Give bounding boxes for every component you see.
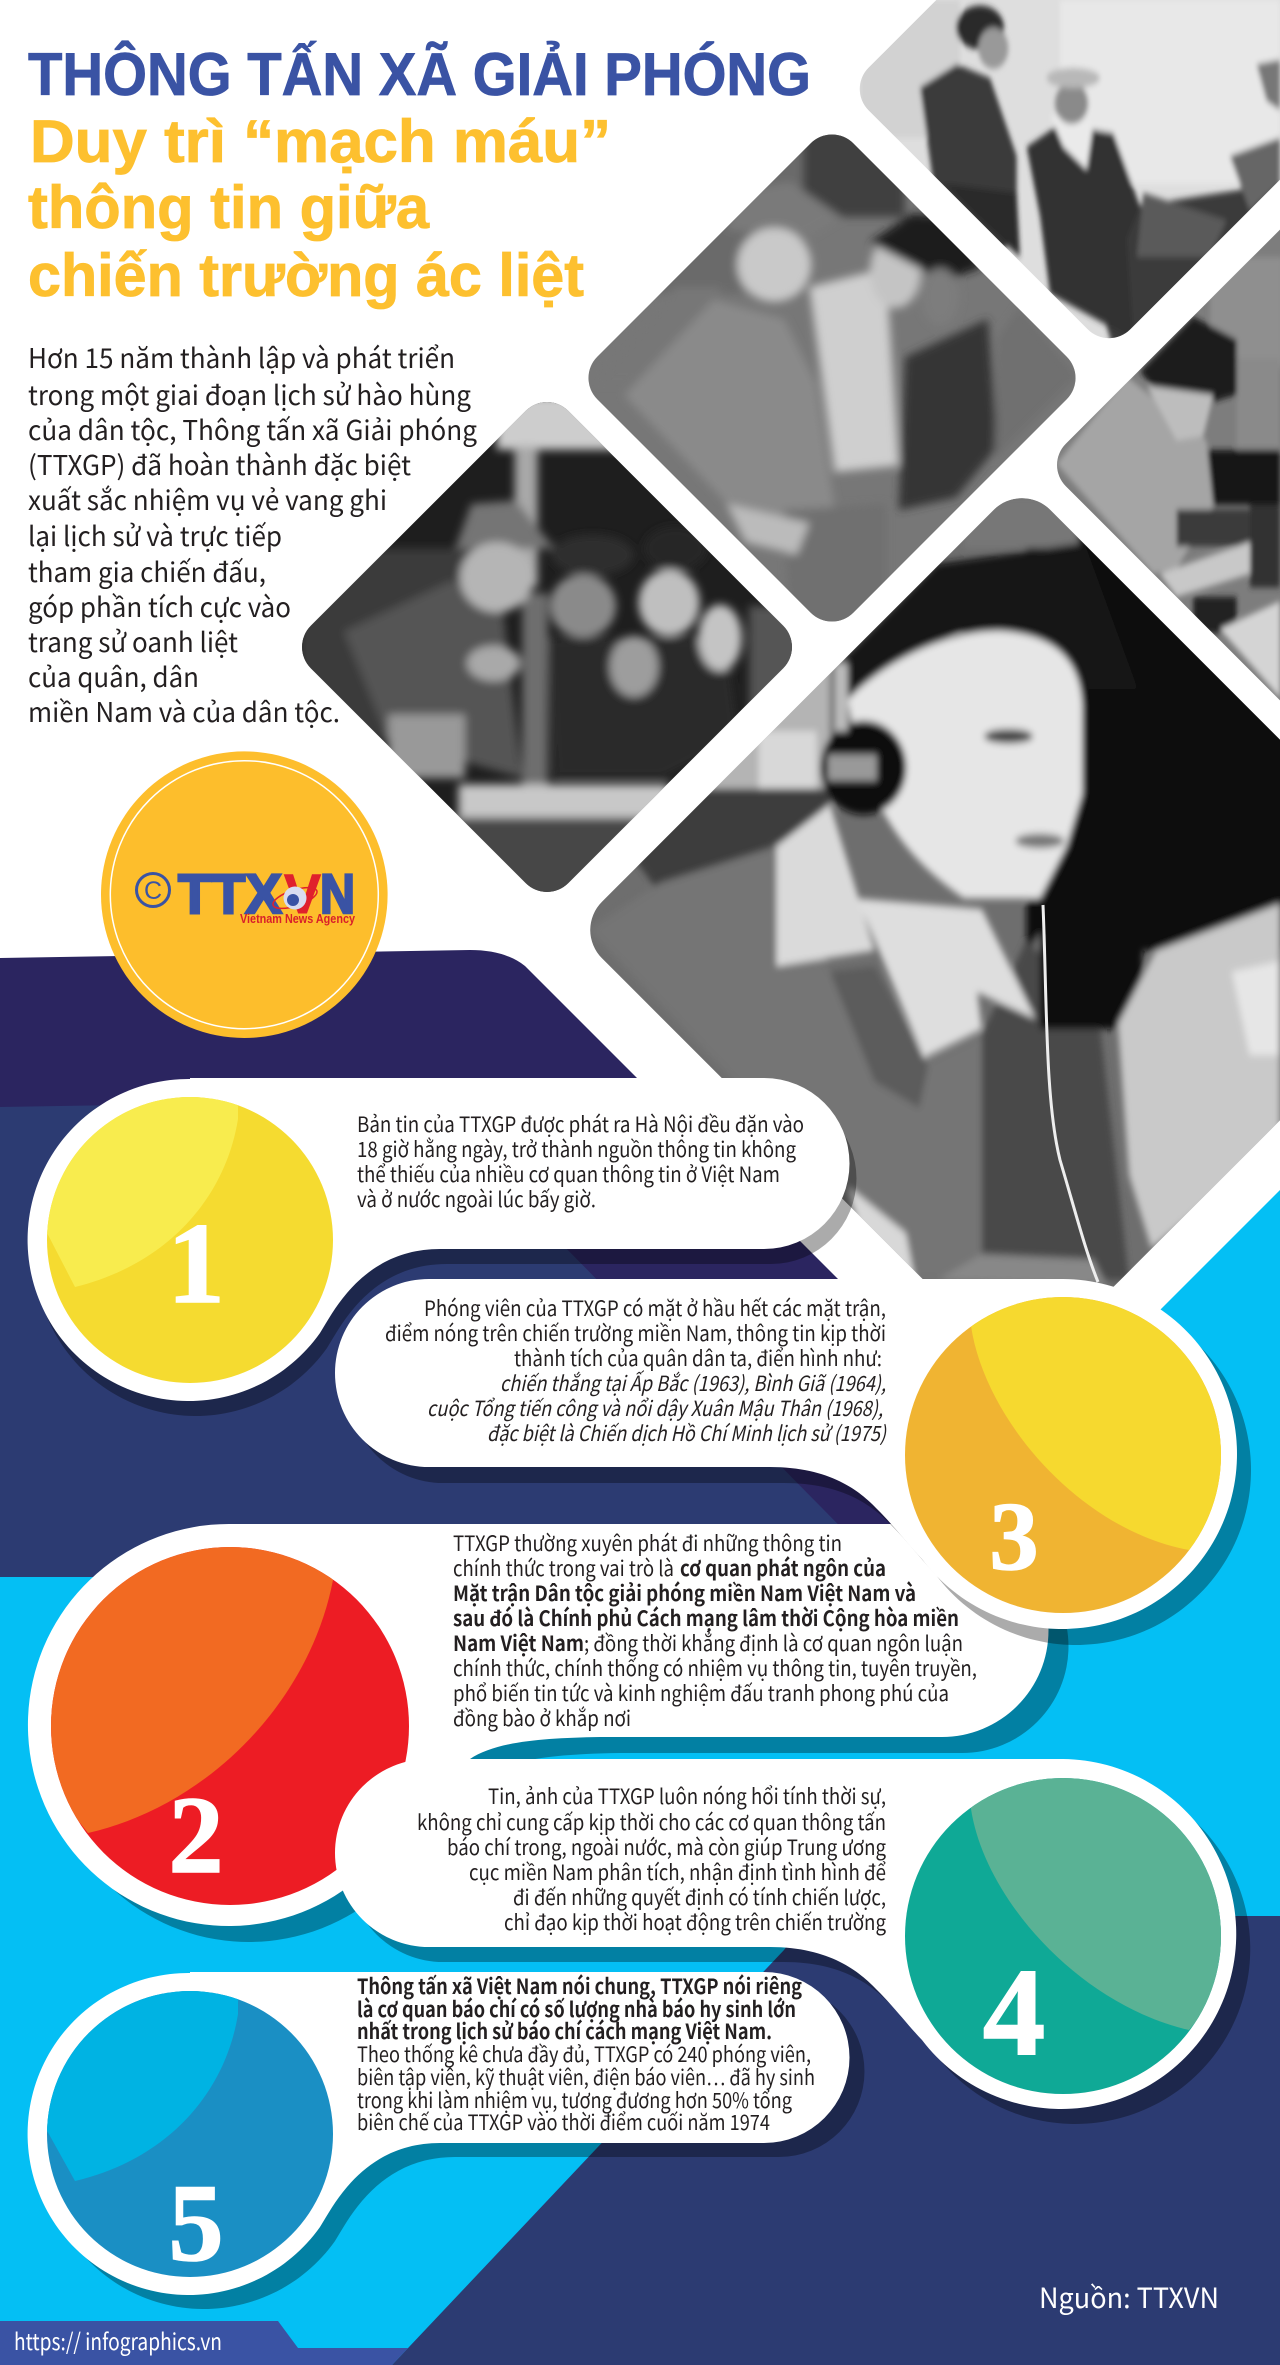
callout 2: cơ quan phát ngôn của: [680, 1553, 886, 1583]
callout 5: là cơ quan báo chí có số lượng nhà báo hy sinh lớn: [357, 1994, 796, 2024]
callout 3: thành tích của quân dân ta, điển hình như:: [514, 1343, 882, 1373]
callout 2: TTXGP thường xuyên phát đi những thông tin: [453, 1528, 842, 1558]
callout 1: và ở nước ngoài lúc bấy giờ.: [357, 1184, 596, 1214]
intro paragraph: miền Nam và của dân tộc.: [28, 691, 340, 730]
callout 3: chiến thắng tại Ấp Bắc (1963), Bình Giã (1964),: [500, 1368, 886, 1398]
callout 5: nhất trong lịch sử báo chí cách mạng Việt Nam.: [357, 2016, 772, 2046]
intro paragraph: của dân tộc, Thông tấn xã Giải phóng: [28, 409, 477, 448]
callout 2: chính thức trong vai trò là: [453, 1553, 674, 1583]
intro paragraph: lại lịch sử và trực tiếp: [28, 515, 282, 554]
title: thông tin giữa: [28, 174, 430, 241]
title: THÔNG TẤN XÃ GIẢI PHÓNG: [28, 41, 811, 108]
intro paragraph: trong một giai đoạn lịch sử hào hùng: [28, 374, 471, 413]
logo badge: Vietnam News Agency: [240, 912, 355, 926]
title: Duy trì “mạch máu”: [30, 108, 611, 175]
callout 3: đặc biệt là Chiến dịch Hồ Chí Minh lịch sử (1975): [487, 1418, 887, 1448]
logo badge: [101, 751, 388, 1038]
callout 4: 4: [983, 1944, 1045, 2082]
callout 2: chính thức, chính thống có nhiệm vụ thông tin, tuyên truyền,: [453, 1653, 977, 1683]
logo badge: N: [320, 862, 355, 925]
callout 2: sau đó là Chính phủ Cách mạng lâm thời Cộng hòa miền: [453, 1603, 959, 1633]
callout 4: Tin, ảnh của TTXGP luôn nóng hổi tính thời sự,: [488, 1781, 886, 1811]
photo: reporter with a camera: [1057, 230, 1280, 700]
callout 4: [335, 1759, 1250, 2124]
callout 5: biên tập viên, kỹ thuật viên, điện báo viên… đã hy sinh: [357, 2062, 815, 2092]
photo: three men at a window: [290, 395, 800, 901]
callout 3: 3: [990, 1483, 1038, 1591]
callout 5: biên chế của TTXGP vào thời điểm cuối năm 1974: [357, 2107, 770, 2137]
intro paragraph: (TTXGP) đã hoàn thành đặc biệt: [28, 444, 411, 483]
callout 4: cục miền Nam phân tích, nhận định tình hình để: [469, 1857, 886, 1887]
callout 5: trong khi làm nhiệm vụ, tương đương hơn 50% tổng: [357, 2085, 792, 2115]
title: [28, 41, 811, 309]
callout 4: đi đến những quyết định có tính chiến lược,: [513, 1882, 886, 1912]
callout 5: Theo thống kê chưa đầy đủ, TTXGP có 240 phóng viên,: [357, 2039, 811, 2069]
source credit: Nguồn: TTXVN: [1039, 2277, 1219, 2317]
callout 2: ; đồng thời khẳng định là cơ quan ngôn luận: [584, 1628, 963, 1658]
callout 5: Thông tấn xã Việt Nam nói chung, TTXGP nói riêng: [357, 1971, 802, 2001]
intro paragraph: trang sử oanh liệt: [28, 621, 238, 660]
callout 1: thể thiếu của nhiều cơ quan thông tin ở Việt Nam: [357, 1159, 780, 1189]
callout 1: 1: [167, 1200, 225, 1327]
intro paragraph: tham gia chiến đấu,: [28, 551, 266, 590]
callout 4: chỉ đạo kịp thời hoạt động trên chiến trường: [504, 1907, 886, 1937]
callout 2: phổ biến tin tức và kinh nghiệm đấu tranh phong phú của: [453, 1678, 949, 1708]
intro paragraph: xuất sắc nhiệm vụ vẻ vang ghi: [28, 479, 387, 518]
callout 2: [28, 1524, 1068, 1942]
callout 3: Phóng viên của TTXGP có mặt ở hầu hết các mặt trận,: [424, 1293, 886, 1323]
callout 4: không chỉ cung cấp kịp thời cho các cơ quan thông tấn: [417, 1807, 886, 1837]
callout 4: báo chí trong, ngoài nước, mà còn giúp Trung ương: [447, 1832, 886, 1862]
callout 5: 5: [168, 2162, 224, 2284]
photo: radio operator with headphones: [560, 480, 1280, 1300]
footer strip with url: [0, 2321, 408, 2365]
logo badge: V: [284, 862, 321, 925]
footer strip with url: https:// infographics.vn: [14, 2323, 222, 2357]
background: lower navy field: [392, 1916, 1280, 2365]
callout 2: 2: [168, 1774, 224, 1896]
callout 5: [28, 1971, 865, 2309]
intro paragraph: Hơn 15 năm thành lập và phát triển: [28, 337, 455, 376]
callout 2: Nam Việt Nam: [453, 1628, 584, 1658]
callout 3: điểm nóng trên chiến trường miền Nam, thông tin kịp thời: [385, 1318, 886, 1348]
logo badge: TTX: [178, 862, 282, 925]
callout 3: [335, 1279, 1251, 1645]
callout 1: Bản tin của TTXGP được phát ra Hà Nội đều đặn vào: [357, 1109, 804, 1139]
callout 2: đồng bào ở khắp nơi: [453, 1703, 631, 1733]
photo: soldiers on a hillside: [860, 0, 1280, 338]
background: light blue field: [0, 1190, 1280, 2365]
callout 1: [28, 1078, 857, 1416]
photo: group around a radio set: [588, 134, 1076, 622]
background: navy band: [0, 950, 960, 1530]
logo badge: C: [144, 877, 162, 905]
title: chiến trường ác liệt: [28, 242, 584, 309]
callout 3: cuộc Tổng tiến công và nổi dậy Xuân Mậu Thân (1968),: [427, 1393, 883, 1423]
intro paragraph: của quân, dân: [28, 656, 199, 695]
intro paragraph: góp phần tích cực vào: [28, 586, 291, 625]
intro paragraph: [28, 337, 477, 730]
callout 2: Mặt trận Dân tộc giải phóng miền Nam Việt Nam và: [453, 1578, 916, 1608]
callout 1: 18 giờ hằng ngày, trở thành nguồn thông tin không: [357, 1134, 796, 1164]
background: mid blue band: [0, 1100, 890, 1577]
